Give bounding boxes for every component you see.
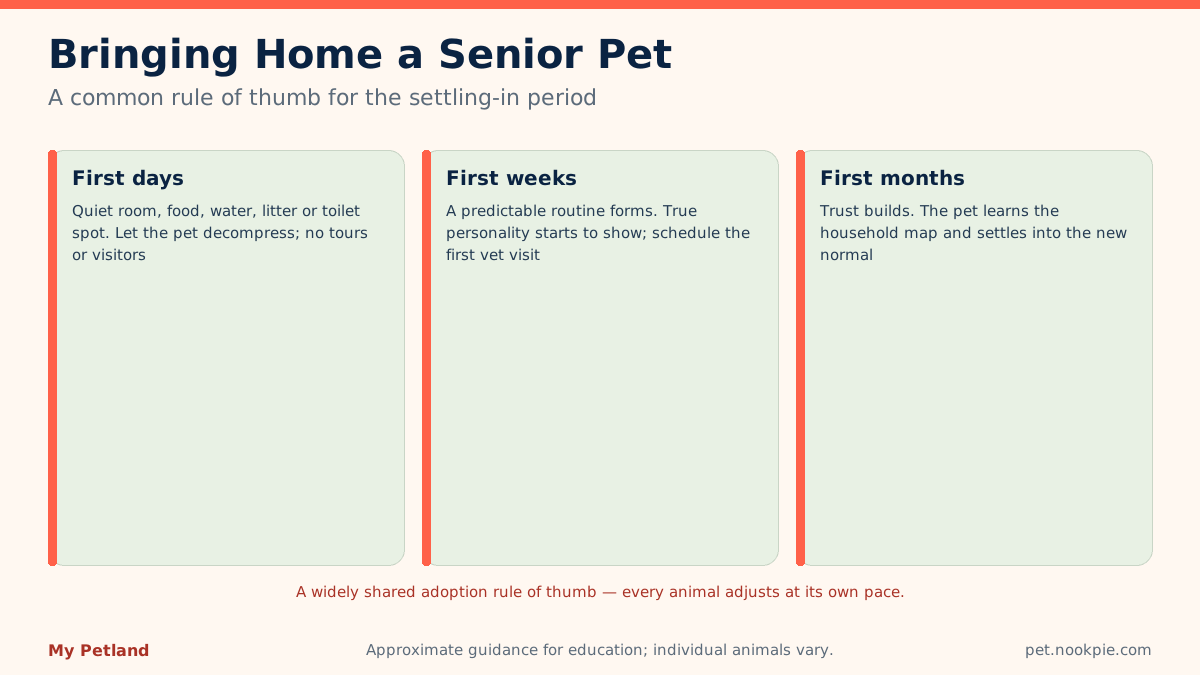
text: first months: normal bbox=[820, 246, 873, 264]
text: first weeks bbox=[446, 202, 750, 264]
heading: first months: First months bbox=[820, 166, 965, 190]
text: first weeks: first vet visit bbox=[446, 246, 540, 264]
text: first months bbox=[819, 202, 1127, 264]
text: first days: or visitors bbox=[72, 246, 146, 264]
footer url: pet.nookpie.com bbox=[1025, 641, 1152, 659]
subtitle: A common rule of thumb for the settling-in period bbox=[48, 86, 597, 111]
text: first weeks: personality starts to show; schedule the bbox=[446, 224, 750, 242]
callout note: A widely shared adoption rule of thumb — every animal adjusts at its own pace. bbox=[296, 583, 905, 601]
panel: first days bbox=[48, 150, 404, 566]
heading: first weeks: First weeks bbox=[446, 166, 577, 190]
footer brand: My Petland bbox=[48, 641, 149, 660]
panel: first months bbox=[796, 150, 1152, 566]
text: first days bbox=[72, 202, 368, 264]
panel: first weeks bbox=[422, 150, 778, 566]
text: first weeks: A predictable routine forms. True bbox=[446, 202, 697, 220]
top accent band bbox=[0, 0, 1200, 9]
text: first months: Trust builds. The pet learns the bbox=[819, 202, 1059, 220]
text: first months: household map and settles into the new bbox=[820, 224, 1127, 242]
footer disclaimer: Approximate guidance for education; individual animals vary. bbox=[366, 641, 834, 659]
text: first days: Quiet room, food, water, litter or toilet bbox=[72, 202, 360, 220]
text: first days: spot. Let the pet decompress; no tours bbox=[72, 224, 368, 242]
title: Bringing Home a Senior Pet bbox=[48, 32, 672, 78]
heading: first days: First days bbox=[72, 166, 184, 190]
